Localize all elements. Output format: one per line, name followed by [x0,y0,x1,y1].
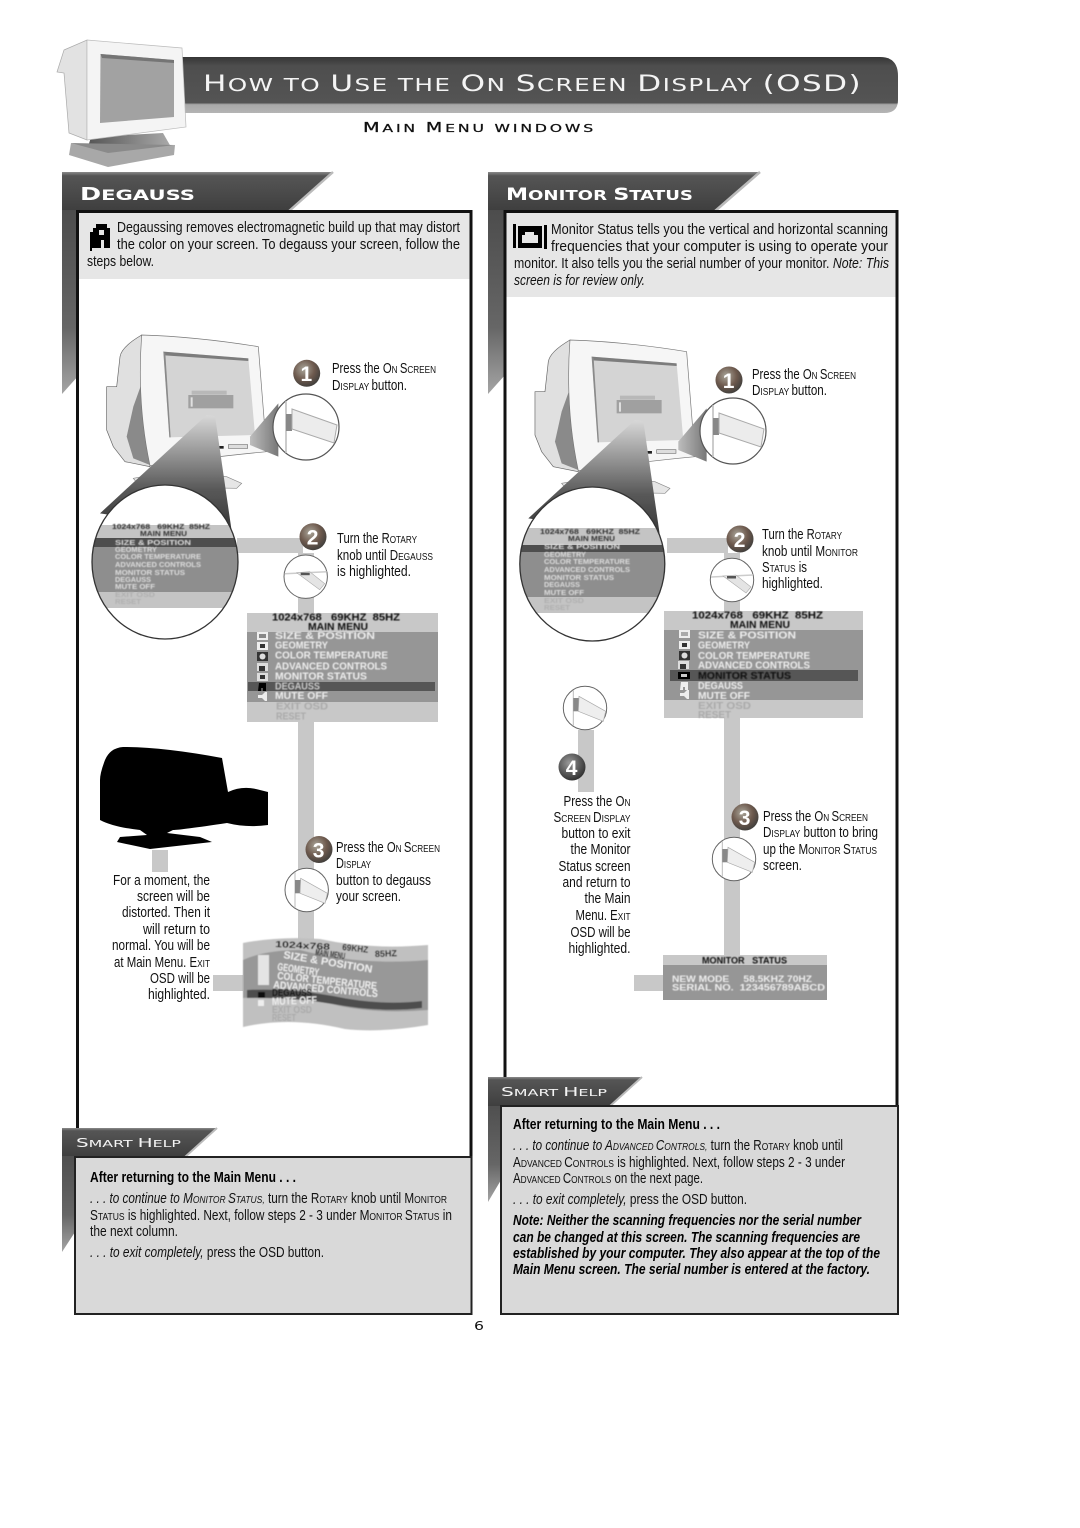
step 4 text: SCREEN DISPLAY [554,810,630,826]
help text: the next column. [90,1224,178,1240]
magnifier: main menu detail: MONITOR STATUS [544,573,614,582]
intro band [506,213,896,297]
icon: monitor status [513,224,547,249]
connector bars [578,538,740,991]
distorted OSD menu: 85HZ [375,948,398,959]
magnifier: main menu detail [90,480,240,645]
title text: H OW TO U SE THE O N S CREEN D ISPLAY (OSD) [203,72,862,97]
help text: After returning to the Main Menu . . . [90,1170,296,1186]
step 3 bullet [306,836,332,863]
icon: header monitor [57,40,186,167]
intro text: degauss: steps below. [87,254,154,270]
magnifier: main menu detail: EXIT OSD [115,590,156,599]
magnifier: main menu detail: DEGAUSS [544,580,580,589]
help text: . . . to continue to ADVANCED CONTROLS, turn the ROTARY knob until [513,1138,843,1154]
OSD main menu: degauss highlighted: ADVANCED CONTROLS [275,660,387,672]
step 3 bullet [732,804,758,830]
intro band [79,213,470,279]
OSD monitor status screen: SERIAL NO. 123456789ABCD [672,982,826,992]
heading: monitor status: M ONITOR S TATUS [506,185,693,204]
help text: ADVANCED CONTROLS on the next page. [513,1171,703,1187]
illustration: monitor with cone [100,335,278,533]
magnifier: main menu detail: MUTE OFF [115,582,155,591]
note text: distortion [112,873,210,1003]
tab [62,1128,217,1252]
step 2 knob [710,558,754,602]
intro text: monitor status [514,222,889,289]
distorted OSD menu: MUTE OFF [272,994,318,1008]
distorted OSD menu: ADVANCED CONTROLS [273,979,378,1000]
help box [75,1157,472,1314]
step 3 text [763,809,878,874]
step 2 bullet: 2 [734,529,745,552]
subtitle: M AIN M ENU WINDOWS [363,120,596,136]
intro text: monitor status: Monitor Status tells you the vertical and horizontal scanning [551,222,888,238]
magnifier: main menu detail: DEGAUSS [115,575,151,584]
step 4 text: Status screen [558,859,630,875]
magnifier: main menu detail: GEOMETRY [544,550,586,559]
intro text: monitor status: frequencies that your computer is using to operate your [551,239,888,255]
help text: Main Menu screen. The serial number is entered at the factory. [513,1262,870,1278]
note text: distortion: screen will be [137,889,210,905]
distorted OSD menu: MAIN MENU [315,947,346,961]
intro text: degauss: Degaussing removes electromagnetic build up that may distort [117,220,460,236]
smart help: degauss [62,1128,472,1314]
heading: degauss: D EGAUSS [80,185,195,205]
magnifier: main menu detail: MUTE OFF [544,588,584,597]
menu icons [257,632,268,701]
step 4 text: Menu. EXIT [576,908,631,924]
step 1 text: DISPLAY button. [332,378,407,394]
distorted OSD menu: 1024x768 [275,939,330,952]
step 4 text: the Monitor [570,842,631,858]
step 4 text: and return to [562,875,630,891]
step 3 button [712,837,756,881]
magnifier: main menu detail: COLOR TEMPERATURE [544,557,630,566]
help box [501,1106,898,1314]
magnifier: main menu detail: ADVANCED CONTROLS [115,560,201,569]
step 2 text [762,527,858,592]
step 2 knob [284,555,327,598]
magnifier: main menu detail: MAIN MENU [140,529,187,538]
step 3 button [285,868,328,912]
step 4 text: Press the ON [564,794,630,810]
step 4 text: highlighted. [568,941,630,957]
OSD main menu: degauss highlighted: MUTE OFF [275,690,329,702]
help text: STATUS is highlighted. Next, follow steps 2 - 3 under MONITOR STATUS in [90,1208,452,1224]
panel: monitor status [488,172,898,1314]
step 4 bullet [558,754,586,780]
step 4 bullet: 4 [566,757,578,780]
panel: degauss [62,172,472,1314]
smart help: monitor status [488,1077,898,1314]
step 2 bullet [300,523,326,550]
step 2 text: knob until DEGAUSS [337,548,433,564]
step 3 text: Press the ON SCREEN [763,809,868,825]
OSD main menu: monitor status highlighted: GEOMETRY [698,639,750,651]
step 2 text: Turn the ROTARY [762,527,842,543]
step 3 text: button to degauss [336,873,431,889]
magnifier: front button [700,398,766,464]
step 2 text: Turn the ROTARY [337,531,417,547]
menu icons [678,630,690,699]
note text: distortion: at Main Menu. EXIT [114,955,210,971]
step 1 bullet: 1 [723,370,735,393]
step 3 text: your screen. [336,889,401,905]
intro text: monitor status: monitor. It also tells you the serial number of your monitor. Note: This [514,256,889,272]
magnifier: main menu detail: SIZE & POSITION [544,542,620,551]
step 1 text: DISPLAY button. [752,383,827,399]
illustration: monitor with cone [528,340,707,538]
OSD main menu: degauss highlighted: DEGAUSS [275,680,320,692]
OSD main menu: degauss highlighted: EXIT OSD [276,700,328,712]
OSD main menu: monitor status highlighted: MUTE OFF [698,690,751,702]
note text: distortion: For a moment, the [113,873,210,889]
magnifier: main menu detail: SIZE & POSITION [115,538,191,547]
step 1 bullet [716,366,742,394]
magnifier: main menu detail: 1024x768 69KHZ 85HZ [112,522,210,531]
OSD main menu: monitor status highlighted: COLOR TEMPERATURE [698,650,810,662]
OSD main menu: degauss highlighted [247,612,438,722]
box outline [78,212,471,1157]
magnifier: main menu detail: COLOR TEMPERATURE [115,552,201,561]
intro text: degauss [87,220,460,270]
distorted OSD menu: 69KHZ [342,942,369,955]
distorted OSD menu: SIZE & POSITION [283,949,373,976]
step 1 text: Press the ON SCREEN [752,367,856,383]
step 2 text: is highlighted. [337,564,411,580]
magnifier: main menu detail: MAIN MENU [568,534,615,543]
OSD main menu: degauss highlighted: MAIN MENU [308,621,368,633]
OSD monitor status screen [663,955,827,1000]
magnifier: main menu detail: GEOMETRY [115,545,157,554]
magnifier: main menu detail: MONITOR STATUS [115,568,185,577]
OSD monitor status screen: NEW MODE 58.5KHZ 70HZ [672,974,813,984]
step 4 text [554,794,631,957]
step 1 bullet: 1 [300,363,312,386]
distorted OSD menu: RESET [272,1012,296,1024]
OSD main menu: degauss highlighted: GEOMETRY [275,639,328,651]
step 2 bullet [726,526,754,552]
OSD main menu: degauss highlighted: MONITOR STATUS [275,670,367,682]
intro text: degauss: the color on your screen. To degauss your screen, follow the [117,237,460,253]
section tab: degauss [62,172,333,394]
tab: S MART H ELP [501,1085,607,1099]
OSD main menu: monitor status highlighted: RESET [698,709,732,721]
tab [488,1077,642,1202]
step 3 bullet: 3 [313,839,324,862]
note text: distortion: normal. You will be [112,938,210,954]
OSD main menu: degauss highlighted: SIZE & POSITION [275,630,375,642]
step 3 text: DISPLAY [336,856,371,872]
help text [90,1170,452,1261]
help text: ADVANCED CONTROLS is highlighted. Next, follow steps 2 - 3 under [513,1155,845,1171]
help text: After returning to the Main Menu . . . [513,1117,720,1133]
step 2 text: knob until MONITOR [762,544,858,560]
help text: . . . to exit completely, press the OSD button. [90,1245,324,1261]
help text: established by your computer. They also appear at the top of the [513,1246,880,1262]
OSD main menu: monitor status highlighted: EXIT OSD [698,700,751,712]
OSD main menu: monitor status highlighted: MAIN MENU [730,619,790,631]
help text: . . . to exit completely, press the OSD button. [513,1192,747,1208]
OSD main menu: degauss highlighted: RESET [276,710,306,722]
distorted OSD menu: COLOR TEMPERATURE [277,970,377,992]
step 2 bullet: 2 [307,526,318,550]
step 1 text [332,361,436,394]
step 3 bullet: 3 [739,807,750,830]
section tab: monitor status [488,172,760,394]
help text [513,1117,880,1278]
step 4 button [563,686,607,730]
OSD main menu: monitor status highlighted: 1024x768 69KHZ 85HZ [692,609,824,621]
icon: distorted monitor silhouette [100,747,268,849]
magnifier: main menu detail: 1024x768 69KHZ 85HZ [540,527,640,536]
magnifier: main menu detail: EXIT OSD [544,596,585,605]
connector bars [152,538,314,991]
step 3 text: DISPLAY button to bring [763,825,878,841]
title banner [170,57,898,113]
step 3 text: Press the ON SCREEN [336,840,440,856]
step 1 text: Press the ON SCREEN [332,361,436,377]
step 3 text [336,840,440,905]
magnifier: main menu detail: ADVANCED CONTROLS [544,565,630,574]
magnifier: main menu detail: RESET [115,597,141,606]
step 3 text: screen. [763,858,802,874]
note text: distortion: highlighted. [148,987,210,1003]
step 2 text [337,531,433,580]
OSD main menu: monitor status highlighted: MONITOR STATUS [698,670,791,682]
step 1 bullet [293,360,320,387]
step 4 text: the Main [584,891,630,907]
help text: . . . to continue to MONITOR STATUS, turn the ROTARY knob until MONITOR [90,1191,447,1207]
help text: can be changed at this screen. The scanning frequencies are [513,1230,860,1246]
box outline [505,212,897,1106]
distorted OSD menu: GEOMETRY [277,961,320,979]
magnifier: main menu detail: RESET [544,603,570,612]
step 4 text: button to exit [562,826,630,842]
OSD main menu: degauss highlighted: COLOR TEMPERATURE [275,650,388,662]
icon: degauss [90,224,110,251]
OSD main menu: monitor status highlighted: SIZE & POSITION [698,629,796,641]
step 2 text: STATUS is [762,560,807,576]
note text: distortion: will return to [142,922,210,938]
step 1 text [752,367,856,399]
OSD main menu: monitor status highlighted: DEGAUSS [698,680,743,692]
distorted OSD menu [243,938,428,1030]
tab: S MART H ELP [76,1136,181,1150]
OSD main menu: monitor status highlighted [664,609,863,721]
step 4 text: OSD will be [570,925,630,941]
help text: Note: Neither the scanning frequencies nor the serial number [513,1213,862,1229]
intro text: monitor status: screen is for review only. [514,273,645,289]
distorted OSD menu: EXIT OSD [272,1004,312,1016]
magnifier: front button [273,394,339,460]
distorted OSD menu: DEGAUSS [272,987,312,999]
OSD main menu: monitor status highlighted: ADVANCED CONTROLS [698,659,810,671]
page number: 6 [474,1319,484,1333]
OSD monitor status screen: MONITOR STATUS [702,956,787,966]
note text: distortion: distorted. Then it [122,905,210,921]
note text: distortion: OSD will be [150,971,210,987]
step 3 text: up the MONITOR STATUS [763,842,877,858]
step 2 text: highlighted. [762,576,823,592]
OSD main menu: degauss highlighted: 1024x768 69KHZ 85HZ [272,612,401,624]
magnifier: main menu detail [518,482,668,647]
